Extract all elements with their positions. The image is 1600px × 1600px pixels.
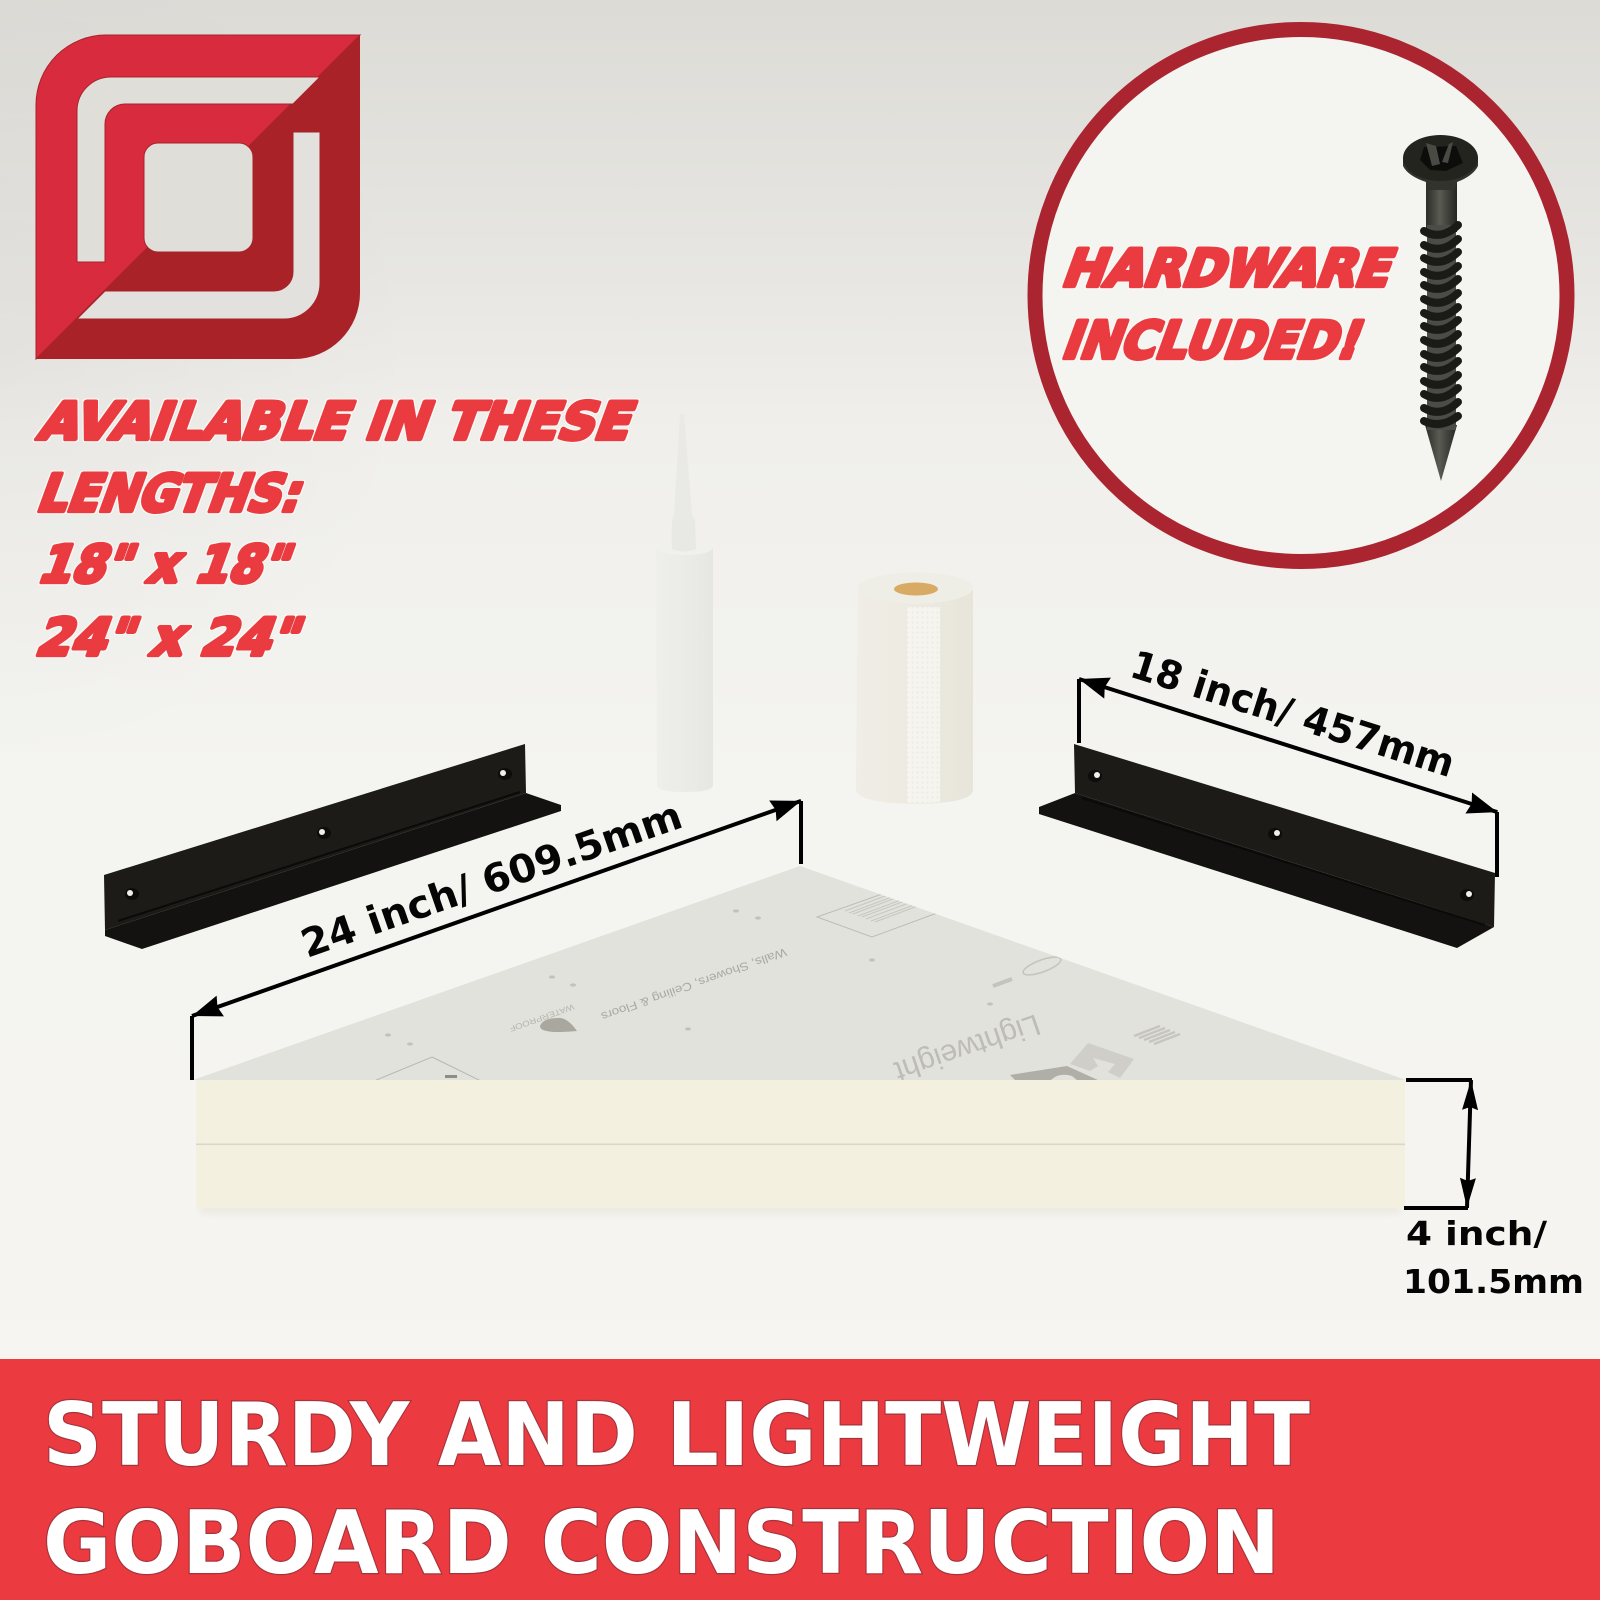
tape roll <box>856 572 973 804</box>
callout text: INCLUDED! <box>1055 312 1373 371</box>
dimension: 24 inch: 24 inch/ 609.5mm <box>295 793 688 967</box>
banner title: STURDY AND LIGHTWEIGHT <box>43 1384 1310 1486</box>
foam board <box>193 866 1406 1213</box>
banner title: GOBOARD CONSTRUCTION <box>43 1492 1280 1594</box>
logo <box>36 35 360 359</box>
banner <box>0 1359 1600 1600</box>
heading: available lengths: 24" x 24" <box>29 609 312 668</box>
heading: available lengths <box>29 393 644 668</box>
heading: available lengths: LENGTHS: <box>30 465 314 524</box>
callout text: HARDWARE <box>1055 240 1404 299</box>
dimension: 18 inch: 18 inch/ 457mm <box>1125 643 1460 787</box>
right bracket <box>1039 744 1495 948</box>
banner title <box>43 1384 1310 1594</box>
callout: hardware included <box>1035 30 1567 562</box>
left bracket <box>104 744 561 949</box>
heading: available lengths: AVAILABLE IN THESE <box>31 393 644 452</box>
mounting holes <box>1088 770 1474 901</box>
board printing: Lightweight <box>890 1007 1044 1088</box>
board front edge <box>196 1080 1405 1208</box>
sealant tube <box>656 414 713 792</box>
dimension: 24 inch <box>188 791 805 1080</box>
screw recess <box>1420 142 1463 171</box>
board printing: Walls, Showers, Ceiling & Floors <box>599 945 788 1022</box>
dimension: 4 inch: 4 inch/ <box>1406 1214 1548 1253</box>
dimension: 4 inch: 101.5mm <box>1403 1262 1584 1301</box>
callout text <box>1055 240 1404 371</box>
icon: screw <box>1403 135 1478 481</box>
mounting holes <box>125 768 512 900</box>
dimension: 4 inch <box>1403 1080 1584 1301</box>
board printing <box>374 893 1180 1088</box>
heading: available lengths: 18" x 18" <box>31 536 302 595</box>
board printing: WATERPROOF <box>508 1002 575 1033</box>
dimension: 18 inch <box>1076 643 1501 877</box>
